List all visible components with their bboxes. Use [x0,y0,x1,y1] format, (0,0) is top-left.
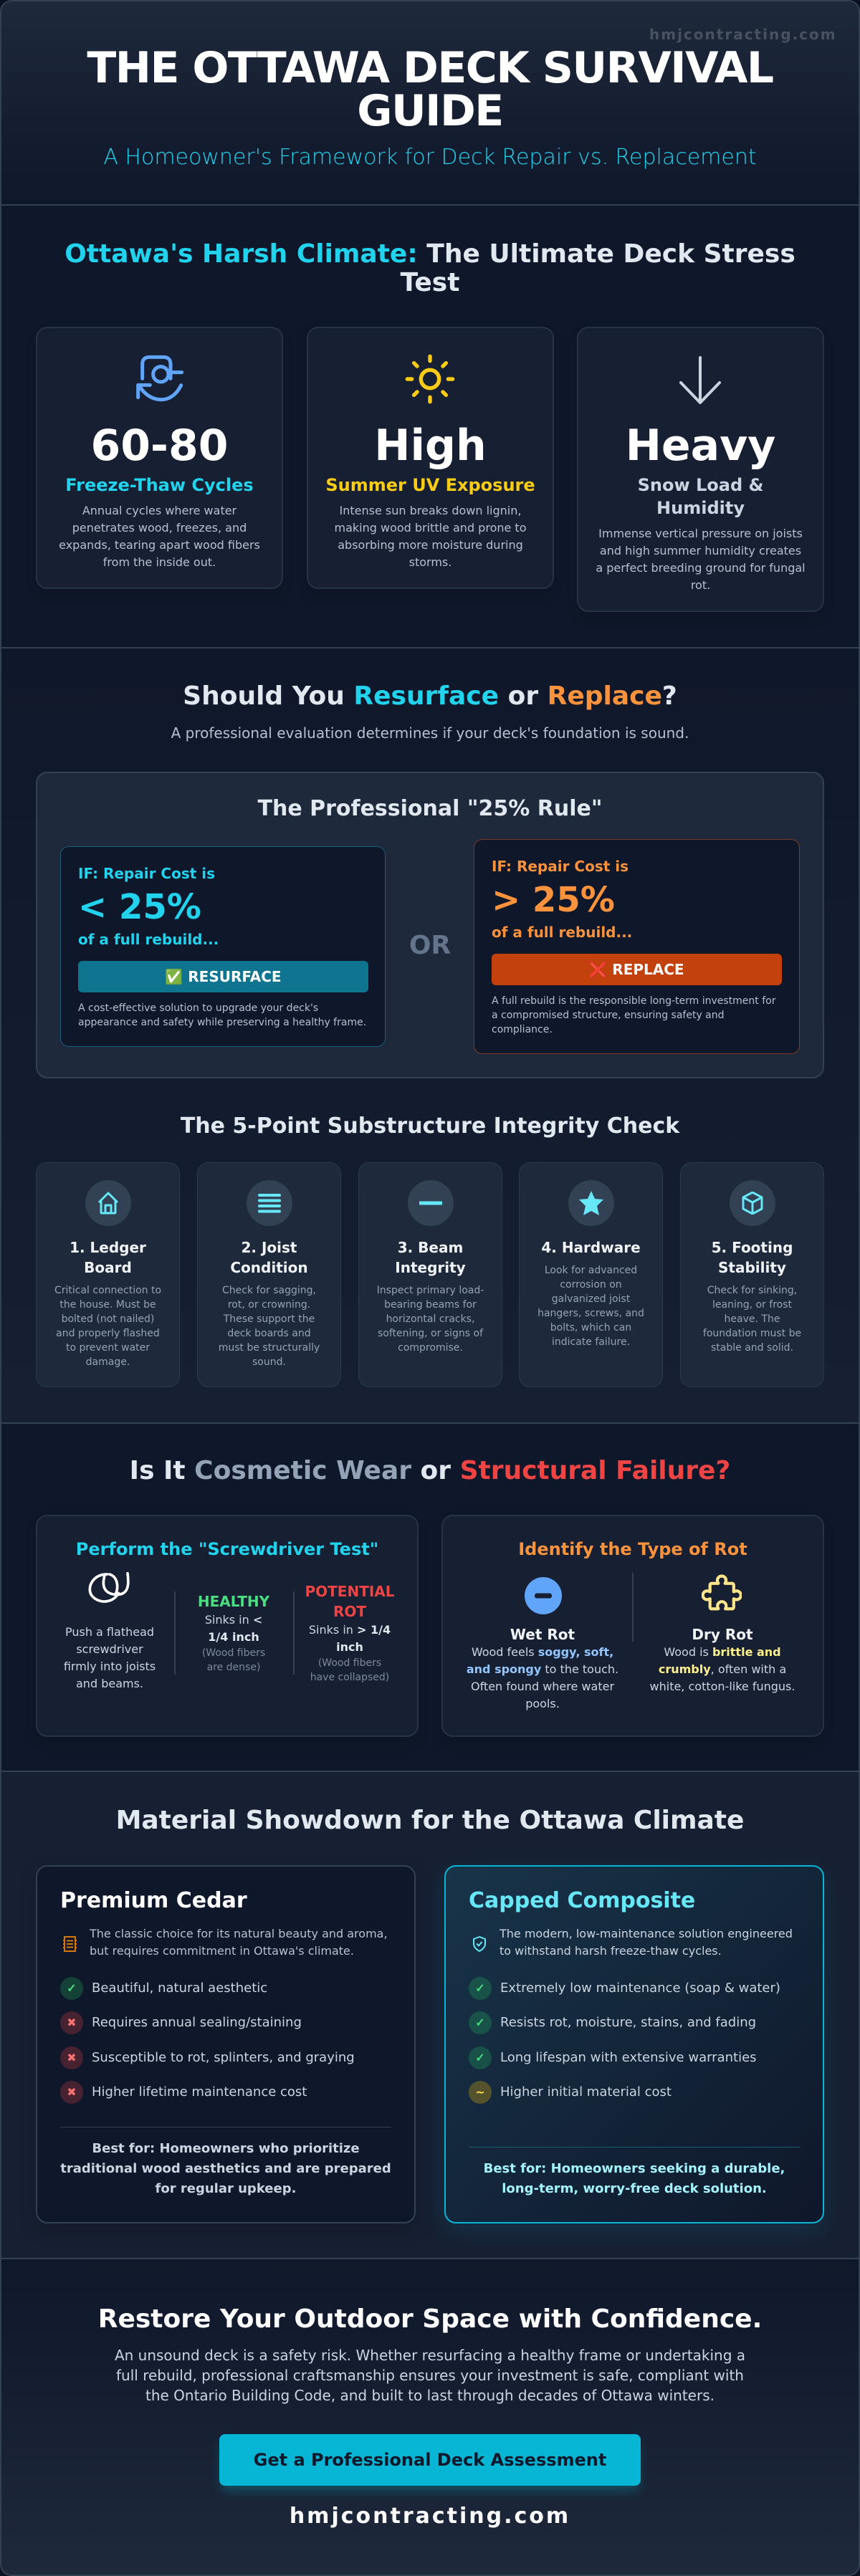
card: under 25 percent [60,846,386,1047]
explanation [492,995,775,1035]
title: Stability [718,1259,786,1276]
best for [37,2139,414,2199]
resurface subheading: A professional evaluation determines if your deck's foundation is sound. [171,724,689,742]
dry rot text [650,1645,795,1693]
title: Premium Cedar [60,1888,247,1913]
text: Inspect primary load- [377,1285,484,1296]
button: replace [492,954,782,985]
icon: check: ✓ [67,1981,77,1995]
text: indicate failure. [552,1336,630,1348]
text: the house. Must be [59,1299,156,1311]
explanation: compliance. [492,1024,553,1035]
instruction: Push a flathead [65,1625,154,1639]
explanation: appearance and safety while preserving a healthy frame. [78,1017,366,1028]
icon: cross [60,2011,83,2034]
icon: cross [60,2046,83,2069]
rot result [309,1623,391,1654]
healthy note: (Wood fibers [202,1647,265,1659]
row: sealing [60,2011,302,2034]
stat: Heavy [626,421,775,471]
condition end: of a full rebuild... [78,931,219,948]
wet rot text [467,1645,618,1710]
description: penetrates wood, freezes, and [72,521,247,535]
substructure heading: The 5-Point Substructure Integrity Check [181,1114,679,1139]
condition: IF: Repair Cost is [492,858,629,875]
rot label: POTENTIAL [305,1583,394,1600]
title: 5. Footing [712,1239,793,1256]
explanation: A cost-effective solution to upgrade your deck's [78,1002,318,1014]
cta button: Get a Professional Deck Assessment [254,2450,606,2470]
text: galvanized joist [552,1293,630,1305]
card: footing stability [680,1162,824,1387]
card: joist condition [197,1162,341,1387]
healthy result: Sinks in < [205,1613,262,1627]
card: UV [307,327,554,589]
icon: arrow down [679,356,721,404]
text [54,1285,161,1368]
description: Intense sun breaks down lignin, [340,504,521,517]
icon: sun [406,354,454,404]
title: Board [84,1259,132,1276]
icon: check: ✓ [475,2051,485,2064]
icon: cross: ✖ [67,2016,77,2029]
text: Long lifespan with extensive warranties [500,2050,757,2065]
OR label: OR [409,931,451,960]
description [500,1925,793,1960]
text [703,1285,801,1354]
icon: freeze-thaw cycle [136,355,183,401]
icon: cross: ✖ [67,2051,77,2064]
icon: shield check [471,1935,488,1953]
card: snow [577,327,824,612]
condition: IF: Repair Cost is [78,865,215,882]
row: cost [60,2081,390,2104]
card: over 25 percent [474,839,800,1054]
dry rot text: Wood is brittle and [664,1645,781,1659]
section: resurface or replace [0,647,860,1424]
watermark: hmjcontracting.com [649,26,837,43]
dry rot text: white, cotton-like fungus. [650,1680,795,1693]
title: 3. Beam [398,1239,463,1256]
title: Integrity [395,1259,466,1276]
text: Look for advanced [545,1265,637,1276]
divider [469,2147,800,2148]
label: Snow Load & [638,475,763,495]
text: compromise. [398,1342,463,1354]
icon: lines [247,1180,292,1226]
healthy result: 1/4 inch [208,1630,259,1644]
rot result: inch [336,1640,363,1654]
threshold: < 25% [78,887,201,927]
instruction [64,1625,156,1690]
text: heave. The [725,1313,780,1325]
cta button [219,2434,641,2486]
icon: tilde: ~ [475,2085,485,2099]
text: stable and solid. [711,1342,793,1354]
button: resurface [78,961,368,992]
wet rot text: Wood feels soggy, soft, [472,1645,613,1659]
panel: type of rot [441,1515,824,1737]
icon: dry rot puzzle [702,1574,742,1611]
label [638,475,763,518]
description: Immense vertical pressure on joists [598,527,803,540]
text: must be structurally [219,1342,320,1354]
title: Condition [230,1259,308,1276]
divider [174,1591,176,1675]
row: lifespan [469,2046,798,2069]
card: ledger board [36,1162,180,1387]
title [230,1239,308,1276]
text: damage. [86,1356,130,1368]
title: Capped Composite [469,1888,695,1913]
rule heading: The Professional "25% Rule" [258,796,602,821]
wet rot text: Often found where water [471,1680,614,1693]
icon: house [85,1180,131,1226]
title: GUIDE [357,86,503,136]
text: sound. [252,1356,286,1368]
cta text: full rebuild, professional craftsmanship ensures your investment is safe, compliant with [116,2367,744,2384]
text: bolted (not nailed) [62,1313,154,1325]
healthy label: HEALTHY [198,1593,269,1610]
climate heading: Test [401,268,459,297]
text: hangers, screws, and [538,1308,644,1319]
card: hardware [519,1162,663,1387]
result: healthy [198,1593,269,1673]
rot note: have collapsed) [310,1672,389,1683]
card: cedar [36,1865,416,2223]
icon: tilde [469,2081,492,2104]
panel heading: Identify the Type of Rot [518,1539,747,1559]
icon: cross: ✖ [67,2085,77,2099]
explanation [78,1002,366,1028]
rot note [310,1657,389,1683]
stat: 60-80 [91,421,228,471]
wet rot title: Wet Rot [510,1626,575,1643]
cta text: the Ontario Building Code, and built to last through decades of Ottawa winters. [145,2387,715,2404]
dry rot title: Dry Rot [692,1626,753,1643]
divider [632,1573,634,1642]
header section [0,0,860,206]
row: resists [469,2011,798,2034]
text: Critical connection to [54,1285,161,1296]
icon: star [568,1180,614,1226]
text [219,1285,320,1368]
best for: for regular upkeep. [156,2181,296,2196]
rot label: ROT [333,1603,366,1620]
cta heading: Restore Your Outdoor Space with Confidence. [98,2304,762,2334]
description: to withstand harsh freeze-thaw cycles. [500,1944,722,1958]
text: Higher lifetime maintenance cost [92,2084,307,2099]
best for: long-term, worry-free deck solution. [502,2181,767,2196]
label: Freeze-Thaw Cycles [65,475,254,495]
icon: check: ✓ [475,1981,485,1995]
description [59,504,260,569]
dry rot text: crumbly, often with a [659,1662,786,1676]
cosmetic heading: Is It Cosmetic Wear or Structural Failure? [130,1456,730,1485]
panel: 25% rule [36,772,824,1078]
instruction: screwdriver [76,1642,143,1656]
text: Check for sinking, [707,1285,797,1296]
icon: check [469,2046,492,2069]
threshold: > 25% [492,880,615,920]
explanation: a compromised structure, ensuring safety and [492,1010,725,1021]
title: 4. Hardware [541,1239,641,1256]
cta text [0,2345,860,2405]
healthy note [202,1647,265,1673]
cta text: An unsound deck is a safety risk. Whether resurfacing a healthy frame or undertaking a [115,2347,745,2364]
rot result: Sinks in > 1/4 [309,1623,391,1637]
description: but requires commitment in Ottawa's climate. [90,1944,354,1958]
healthy note: are dense) [207,1662,260,1673]
text: softening, or signs of [378,1328,483,1339]
description: absorbing more moisture during [338,538,523,552]
explanation: A full rebuild is the responsible long-term investment for [492,995,775,1007]
icon: wood plank [63,1936,77,1952]
text: foundation must be [703,1328,801,1339]
text: Higher initial material cost [500,2084,672,2099]
label: Humidity [656,498,745,518]
icon: wet rot [525,1577,562,1614]
instruction: firmly into joists [64,1660,156,1673]
description: from the inside out. [103,555,216,569]
text: corrosion on [560,1279,622,1291]
description: making wood brittle and prone to [334,521,526,535]
healthy result [205,1613,262,1644]
text: rot, or crowning. [228,1299,310,1311]
best for [446,2159,823,2199]
text: deck boards and [227,1328,311,1339]
row: maintenance [469,1977,798,2000]
button: replace: ❌ REPLACE [589,961,684,978]
best for: Best for: Homeowners seeking a durable, [484,2161,785,2176]
text [377,1285,484,1354]
section: cosmetic vs structural [0,1424,860,1772]
title [70,1239,146,1276]
description: storms. [409,555,452,569]
title [395,1239,466,1276]
text: Susceptible to rot, splinters, and graying [92,2050,355,2065]
icon: check [60,1977,83,2000]
text: Requires annual sealing/staining [92,2015,302,2030]
text: Beautiful, natural aesthetic [92,1981,267,1996]
description [89,1927,388,1958]
condition end: of a full rebuild... [492,924,632,941]
best for: Best for: Homeowners who prioritize [92,2141,360,2156]
button: resurface: ✅ RESURFACE [165,968,282,985]
section: climate [0,206,860,647]
description: The modern, low-maintenance solution engineered [500,1927,793,1940]
climate heading [64,239,796,297]
website: hmjcontracting.com [290,2504,570,2529]
text: and properly flashed [56,1328,160,1339]
icon: check: ✓ [475,2016,485,2029]
stat: High [374,421,487,471]
description [596,527,806,592]
text: bearing beams for [384,1299,477,1311]
title: 1. Ledger [70,1239,146,1256]
text: Extremely low maintenance (soap & water) [500,1981,780,1996]
text: Resists rot, moisture, stains, and fading [500,2015,756,2030]
icon: beam [408,1180,454,1226]
section: call to action [0,2259,860,2576]
rot note: (Wood fibers [318,1657,381,1669]
text: horizontal cracks, [386,1313,474,1325]
section: materials [0,1772,860,2259]
description: expands, tearing apart wood fibers [59,538,260,552]
climate heading: Ottawa's Harsh Climate: The Ultimate Deck Stress [64,239,796,269]
text: Check for sagging, [222,1285,316,1296]
description: The classic choice for its natural beauty and aroma, [90,1927,388,1940]
card: freeze-thaw [36,327,283,589]
row: rot [60,2046,355,2069]
label: Summer UV Exposure [325,475,535,495]
card: composite [444,1865,824,2223]
materials heading: Material Showdown for the Ottawa Climate [116,1806,744,1835]
rot label [305,1583,394,1620]
instruction: and beams. [76,1677,143,1690]
row: aesthetic [60,1977,267,2000]
icon: fingerprint loops [89,1572,130,1603]
title [712,1239,793,1276]
panel: screwdriver test [36,1515,419,1737]
description: Annual cycles where water [82,504,236,517]
result: potential rot [305,1583,394,1683]
description [334,504,526,569]
subtitle: A Homeowner's Framework for Deck Repair vs. Replacement [103,145,757,170]
icon: check [469,1977,492,2000]
description: a perfect breeding ground for fungal [596,561,806,575]
card: beam integrity [358,1162,502,1387]
text: bolts, which can [550,1322,631,1334]
title [87,43,773,136]
panel heading: Perform the "Screwdriver Test" [76,1539,378,1559]
resurface heading: Should You Resurface or Replace? [183,681,677,711]
text: leaning, or frost [712,1299,792,1311]
wet rot text: and spongy to the touch. [467,1662,618,1676]
divider [293,1591,295,1675]
icon: check [469,2011,492,2034]
text: to prevent water [66,1342,150,1354]
row: cost [469,2081,798,2104]
description: rot. [691,578,710,592]
icon: cross [60,2081,83,2104]
title: THE OTTAWA DECK SURVIVAL [87,43,773,93]
text: These support the [224,1313,315,1325]
title: 2. Joist [241,1239,297,1256]
wet rot text: pools. [525,1697,560,1710]
description: and high summer humidity creates [600,544,801,557]
icon: box [730,1180,775,1226]
text [538,1265,644,1348]
best for: traditional wood aesthetics and are prepared [60,2161,391,2176]
